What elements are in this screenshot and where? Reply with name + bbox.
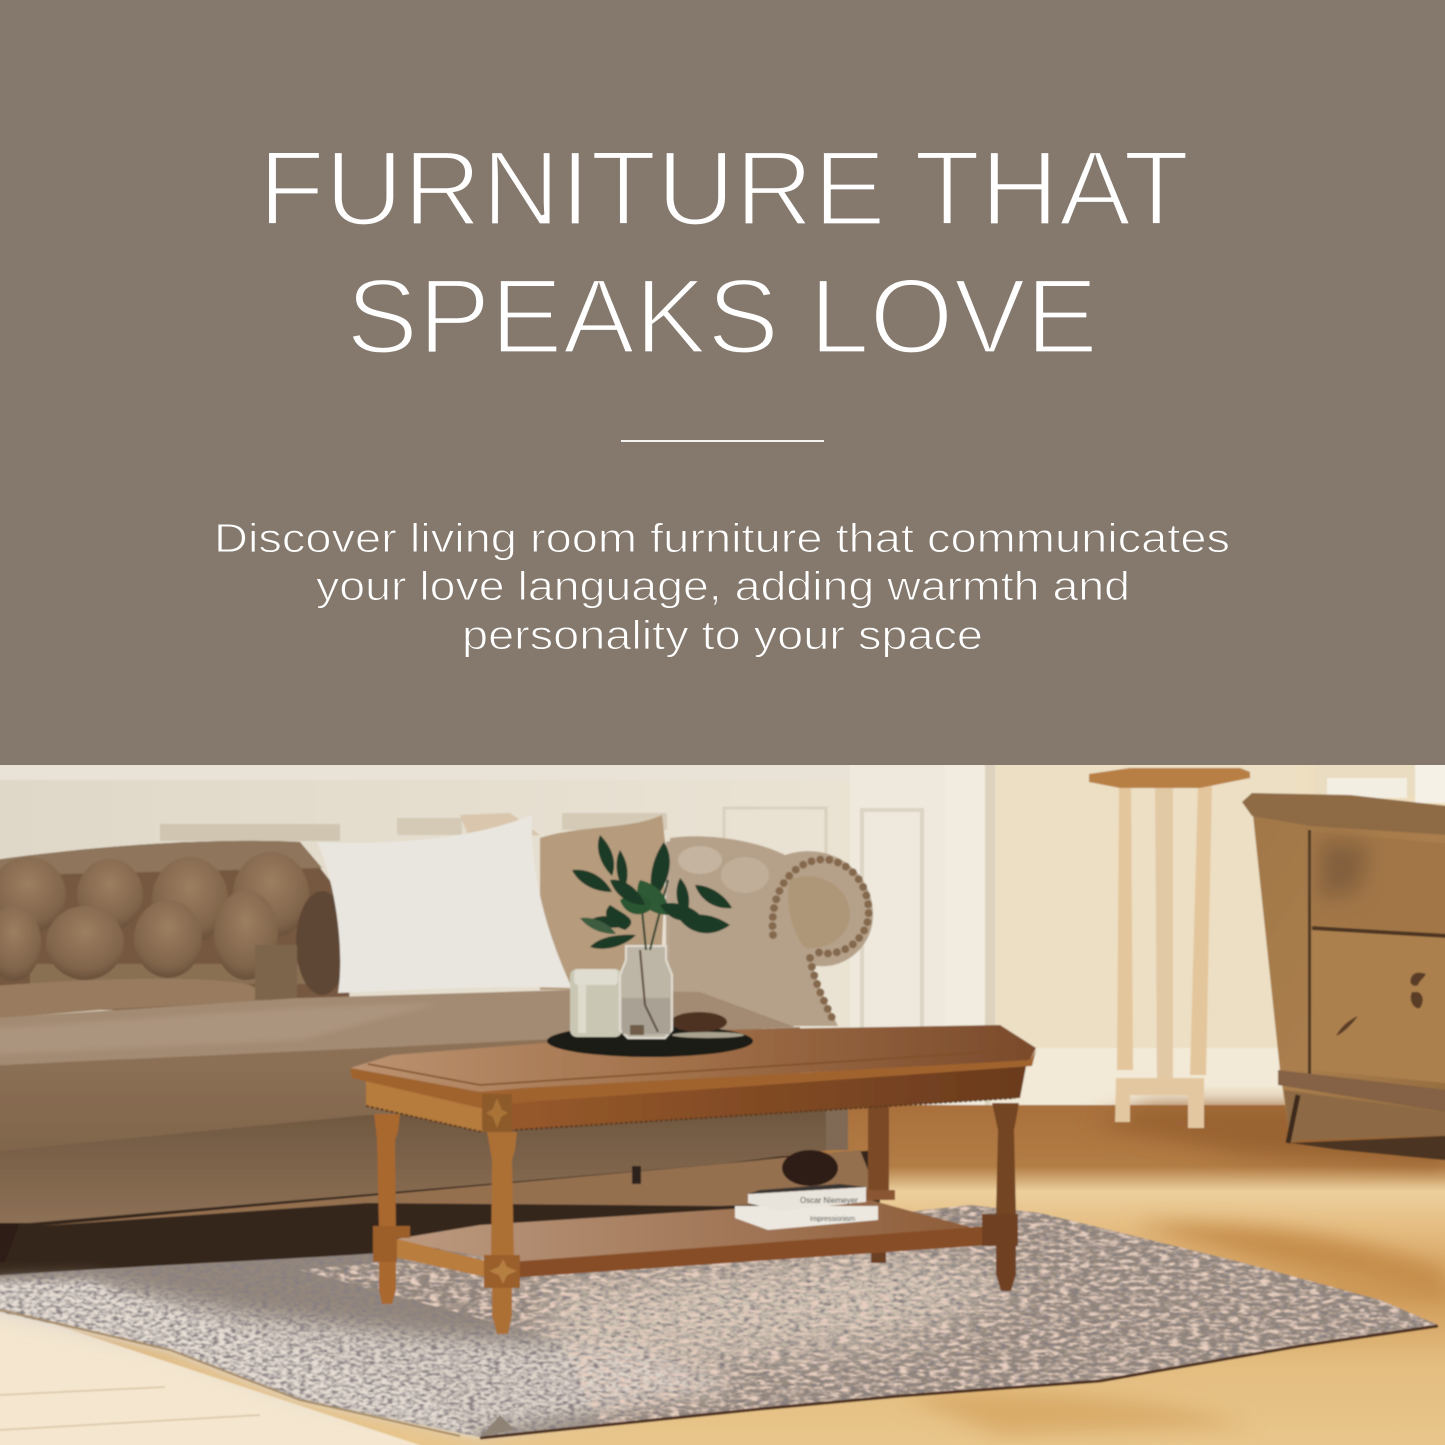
chest of drawers [1242,793,1445,1162]
living room photo panel [0,750,1445,1445]
table top [350,1025,1036,1092]
seat front panel [0,1027,800,1153]
lower shelf [390,1200,1000,1262]
rolled arm [670,836,873,1026]
serving tray [547,1012,753,1057]
intro paragraph: Discover living room furniture that communicates [214,515,1230,561]
front legs [373,1103,1019,1334]
sofa base [0,1105,848,1223]
table rosette left [482,1094,512,1132]
sofa right side back and tan cushion [460,812,540,836]
small cushion [0,979,278,1020]
glass vase [620,946,672,1038]
header panel background [0,0,1445,765]
sofa back with tufting [0,841,350,1010]
seat cushion top [0,990,795,1066]
candle jar [570,969,622,1037]
books on lower shelf: Impressionism [810,1216,855,1223]
sofa [0,813,873,1262]
title: SPEAKS LOVE [346,256,1098,376]
intro paragraph: your love language, adding warmth and [316,563,1130,609]
books on lower shelf [735,1184,878,1230]
title [258,128,1190,376]
side table [1089,768,1250,1128]
coffee table [350,1025,1036,1334]
wall [0,750,1445,1125]
intro paragraph [214,515,1230,658]
back legs [868,1100,889,1195]
title: FURNITURE THAT [258,128,1190,248]
rug [0,1205,1438,1438]
table apron [366,1075,482,1132]
shadow under sofa [0,1150,880,1285]
plant leaves [572,835,732,950]
sofa feet [782,1150,838,1186]
books on lower shelf: Oscar Niemeyer [800,1196,858,1205]
divider line [621,440,824,442]
throw pillow white [317,815,572,993]
intro paragraph: personality to your space [462,612,983,658]
floor [0,1105,1445,1445]
